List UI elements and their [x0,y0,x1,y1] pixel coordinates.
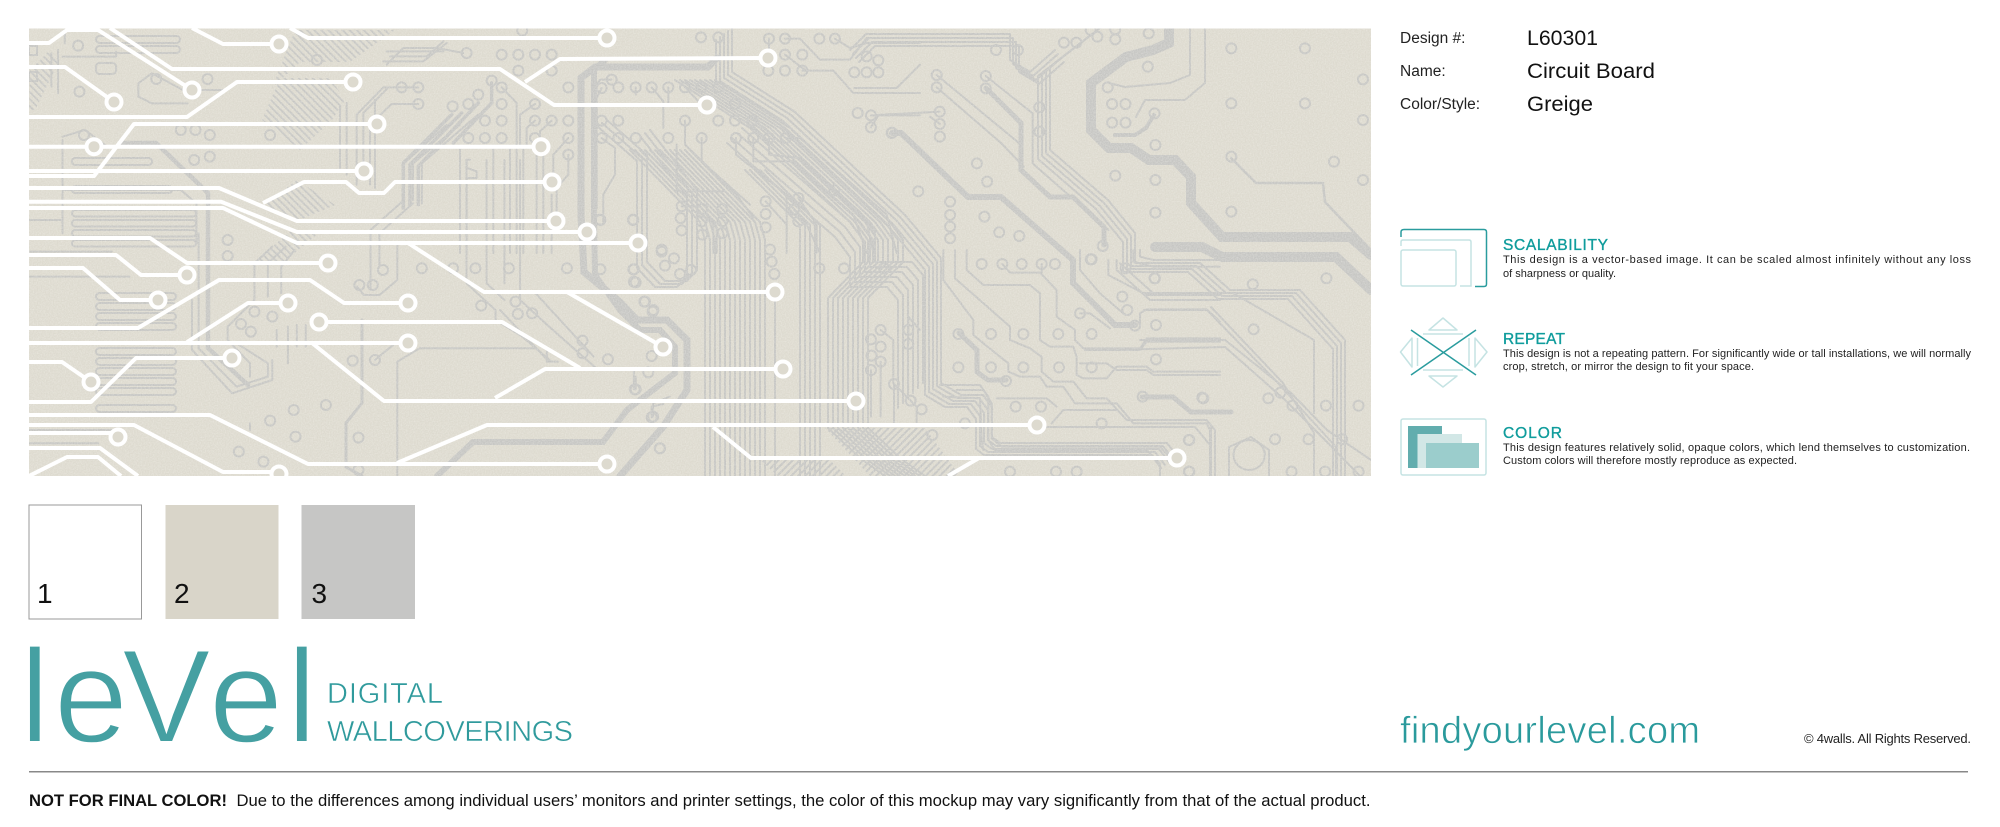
hatched diagonal trace areas [29,30,960,476]
logo tagline: WALLCOVERINGS [327,716,573,748]
traces and vias, lower right [917,250,1220,477]
design labels: Design #: [1400,30,1465,47]
repeat description: crop, stretch, or mirror the design to fit your space. [1503,361,1754,373]
traces traced at left [29,30,670,476]
color description [1503,442,1970,467]
design values: Greige [1527,92,1593,116]
swatch 3 [302,505,415,619]
logo: leVel digital wallcoverings [20,623,573,771]
design values: Circuit Board [1527,59,1655,83]
logo tagline [327,678,573,748]
icon: overlapping colour blocks [1401,419,1486,475]
panel: circuit board pattern [29,24,1371,485]
logo tagline: DIGITAL [327,678,443,710]
feature: scalability [1401,230,1972,286]
feature: color [1401,419,1970,475]
swatch 2: 2 [174,578,190,609]
parallel trace bundles [597,28,1371,485]
repeat description: This design is not a repeating pattern. For significantly wide or tall installations, we will normally [1503,348,1972,360]
design labels [1400,30,1480,113]
scalability description [1503,254,1972,280]
scalability heading: SCALABILITY [1503,237,1608,254]
design values [1527,26,1655,116]
website address: findyourlevel.com [1400,710,1700,752]
paper texture [29,28,1371,476]
traces and vias, lower center [628,247,920,453]
scalability description: This design is a vector-based image. It can be scaled almost infinitely without any loss [1503,254,1972,266]
colour swatches [29,505,415,619]
scalability description: of sharpness or quality. [1503,268,1616,280]
swatch 2 [166,505,278,619]
color heading: COLOR [1503,425,1562,442]
color description: This design features relatively solid, opaque colors, which lend themselves to customization. [1503,442,1970,454]
white ring terminals [84,30,1184,482]
white circuit traces with rings [29,28,1184,482]
design info block [1400,26,1655,116]
thick gray traces [120,28,1371,476]
design labels: Color/Style: [1400,96,1480,113]
design values: L60301 [1527,26,1598,50]
traces and vias, upper middle [340,41,623,253]
icon: nested rectangles [1401,230,1486,286]
feature: repeat [1400,318,1972,387]
copyright: © 4walls. All Rights Reserved. [1804,731,1971,746]
logo wordmark: leVel [20,623,317,771]
swatch 1 [29,505,142,619]
vias, upper right [876,24,1368,477]
disclaimer: NOT FOR FINAL COLOR! [29,791,227,810]
gray circuit traces [29,24,1371,485]
white trace lines [29,28,1177,476]
repeat description [1503,348,1972,373]
design labels: Name: [1400,63,1446,80]
repeat heading: REPEAT [1503,331,1566,348]
vias, left panel [73,26,665,475]
disclaimer: Due to the differences among individual users’ monitors and printer settings, the color of this mockup may vary significantly from that of the actual product. [236,791,1370,810]
icon: crossed repeat arrows [1400,318,1487,387]
traces and vias, center [613,32,923,255]
comb bars, left [29,36,196,412]
swatch 1: 1 [37,578,53,609]
swatch 3: 3 [312,578,327,609]
color description: Custom colors will therefore mostly reproduce as expected. [1503,455,1797,467]
